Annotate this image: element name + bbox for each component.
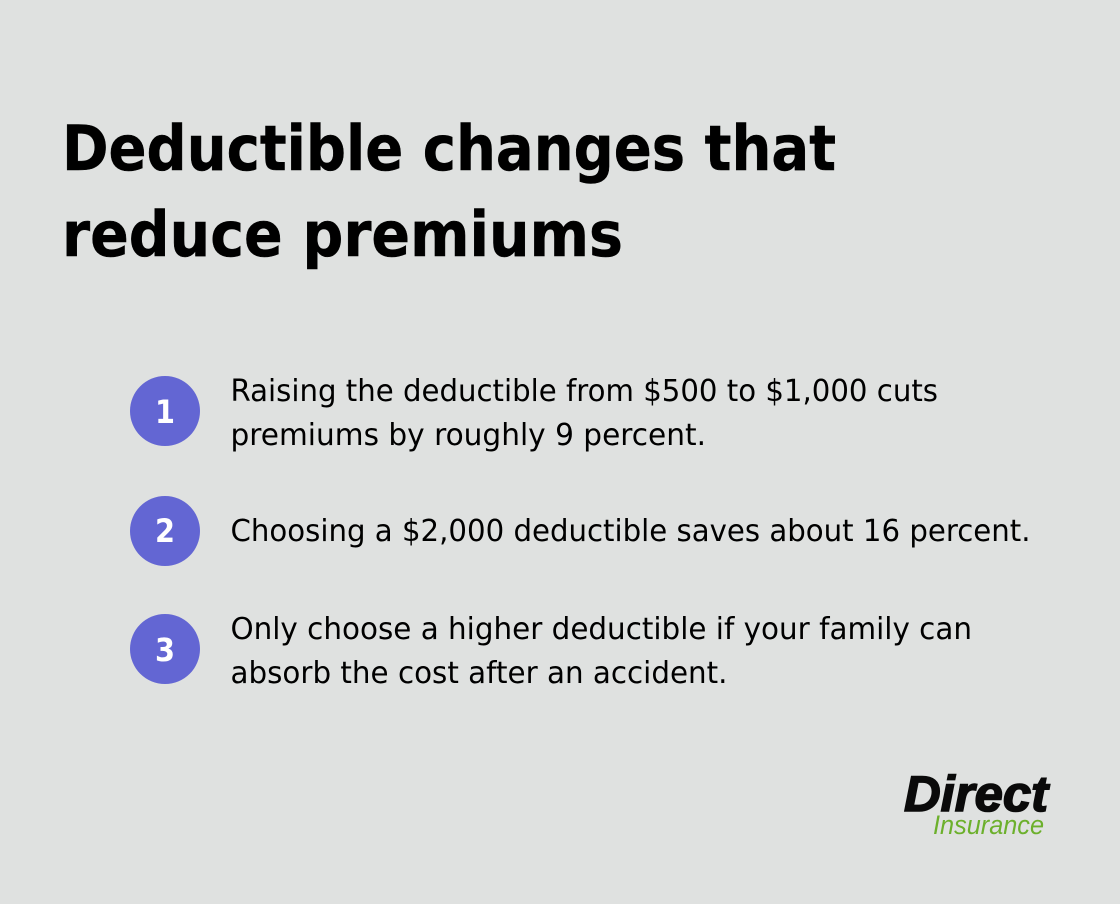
number badge 3: 3 <box>155 631 175 669</box>
list item 2 <box>130 496 1030 566</box>
title <box>62 112 836 271</box>
title: Deductible changes that <box>62 112 836 185</box>
list item 1 <box>130 374 938 453</box>
item 3 text: absorb the cost after an accident. <box>230 656 728 691</box>
item 1 text <box>230 374 938 453</box>
number badge 3 <box>130 614 200 684</box>
item 3 text: Only choose a higher deductible if your family can <box>230 612 972 647</box>
list item 3 <box>130 612 972 691</box>
number badge 2: 2 <box>155 512 175 550</box>
item 1 text: premiums by roughly 9 percent. <box>230 418 706 453</box>
title: reduce premiums <box>62 198 623 271</box>
item 3 text <box>230 612 972 691</box>
logo: Direct Insurance: Direct <box>904 766 1050 822</box>
number badge 2 <box>130 496 200 566</box>
item 2 text: Choosing a $2,000 deductible saves about 16 percent. <box>230 514 1030 549</box>
number badge 1: 1 <box>155 393 175 431</box>
logo: Direct Insurance: Insurance <box>933 810 1044 840</box>
number badge 1 <box>130 376 200 446</box>
item 1 text: Raising the deductible from $500 to $1,000 cuts <box>230 374 938 409</box>
